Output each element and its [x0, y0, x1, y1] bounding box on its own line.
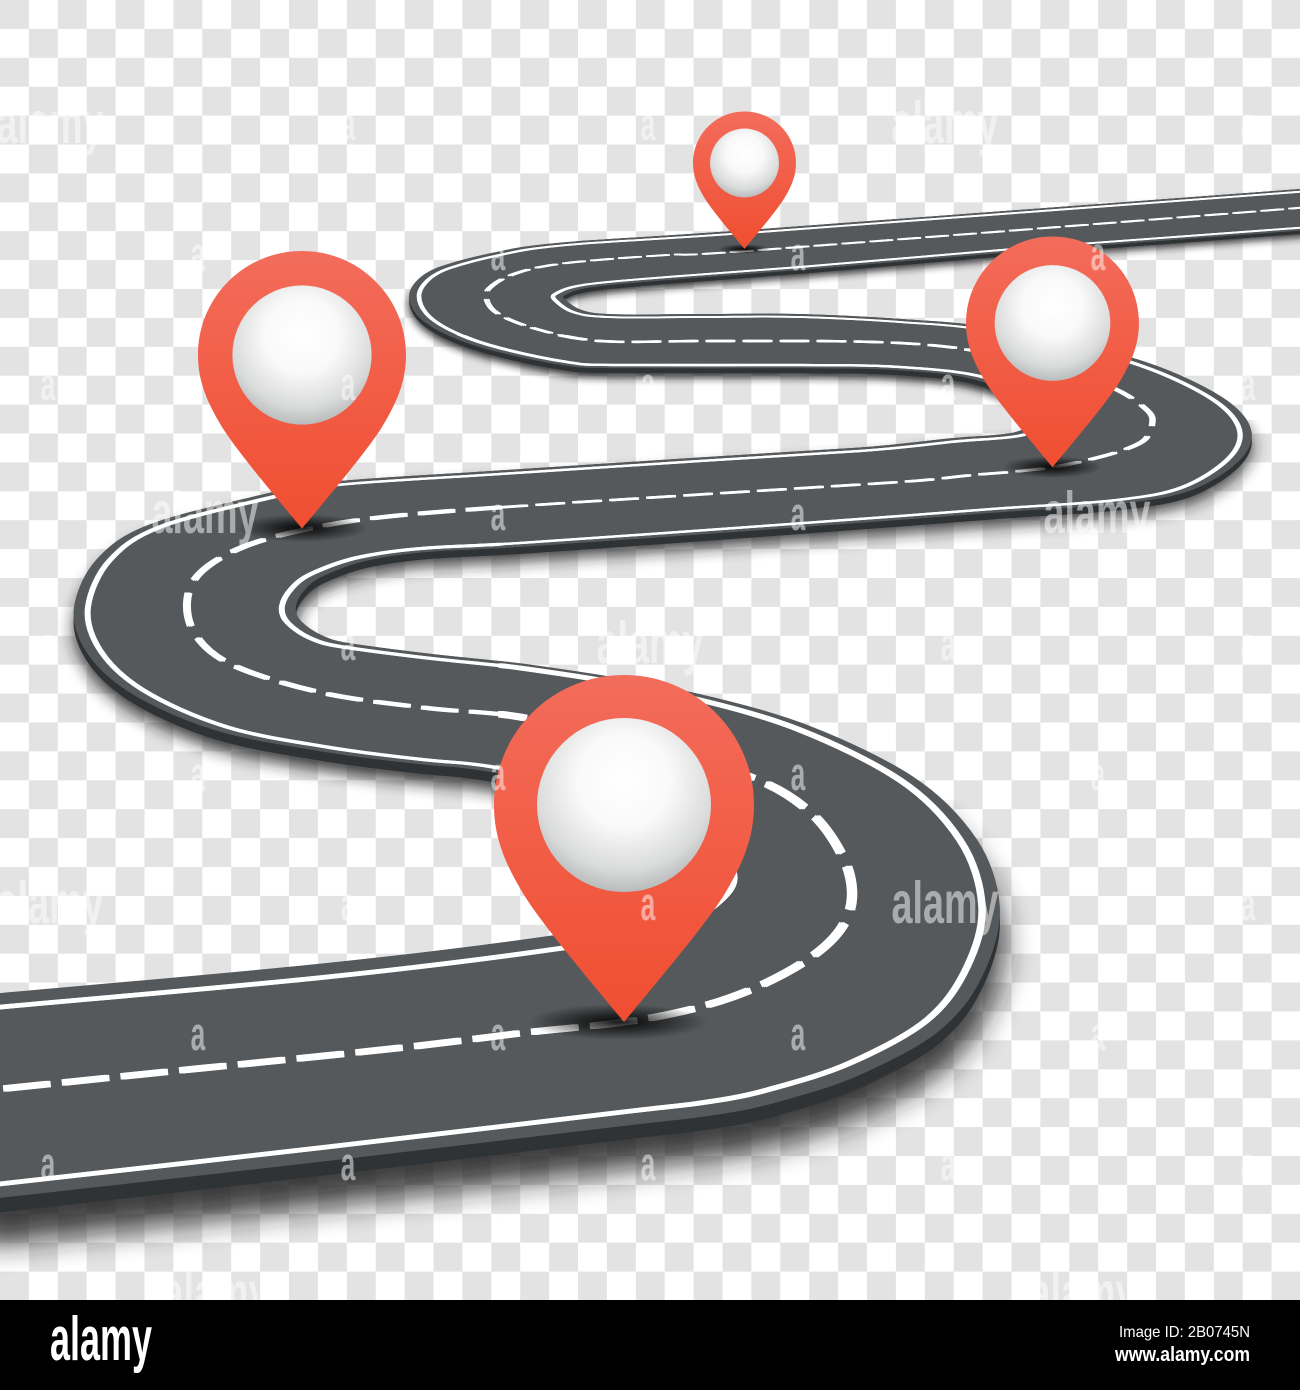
stock watermark overlay: a [641, 879, 656, 931]
road illustration [0, 179, 1300, 1242]
stock watermark overlay: alamy [151, 481, 259, 546]
stock watermark overlay: a [341, 359, 356, 411]
stock watermark overlay: a [491, 1009, 506, 1061]
stock watermark overlay: a [791, 1009, 806, 1061]
stock watermark overlay: a [491, 749, 506, 801]
road surface [0, 179, 1300, 1197]
footer bar [0, 1300, 1300, 1390]
stock watermark overlay: a [1241, 619, 1256, 671]
road side thickness [0, 182, 1300, 1212]
pin contact shadows [236, 244, 1102, 1040]
pin: top small [693, 112, 796, 249]
stock watermark overlay: a [1241, 1139, 1256, 1191]
stock watermark overlay: a [191, 1009, 206, 1061]
stock watermark overlay: alamy [596, 611, 704, 676]
stock watermark overlay: a [941, 359, 956, 411]
stock watermark overlay: a [941, 619, 956, 671]
white edge lines [0, 191, 1300, 1185]
stock watermark overlay: a [641, 359, 656, 411]
stock watermark overlay: alamy [891, 871, 999, 936]
stock watermark overlay: a [341, 99, 356, 151]
stock watermark overlay: a [191, 749, 206, 801]
stock watermark overlay: a [1241, 879, 1256, 931]
stock watermark overlay: a [641, 1139, 656, 1191]
soft drop shadow under road [0, 185, 1300, 1242]
stock watermark overlay: alamy [1029, 1261, 1137, 1326]
stock watermark overlay: a [341, 1139, 356, 1191]
pin: right [966, 237, 1139, 467]
stock watermark overlay: alamy [891, 91, 999, 156]
stock watermark overlay: a [41, 1139, 56, 1191]
image id: Image ID: 2B0745N [1119, 1324, 1250, 1341]
stock watermark overlay: alamy [162, 1261, 270, 1326]
stock watermark overlay: a [1241, 359, 1256, 411]
stock watermark overlay: a [341, 879, 356, 931]
pin: large front [494, 675, 754, 1022]
dashed centre line [0, 207, 1300, 1090]
stock watermark overlay: a [791, 749, 806, 801]
stock watermark overlay: a [1091, 749, 1106, 801]
stock watermark overlay: a [41, 619, 56, 671]
stock watermark overlay: a [791, 229, 806, 281]
website: www.alamy.com [1114, 1344, 1250, 1366]
stock watermark overlay: a [1091, 1009, 1106, 1061]
stock watermark overlay: a [341, 619, 356, 671]
stock watermark overlay: a [191, 229, 206, 281]
stock watermark overlay: a [491, 229, 506, 281]
stock watermark overlay: a [791, 489, 806, 541]
stock watermark overlay: a [1241, 99, 1256, 151]
stock watermark overlay: a [641, 99, 656, 151]
stock watermark overlay: a [491, 489, 506, 541]
footer logo: alamy [50, 1304, 152, 1373]
stock watermark overlay: alamy [1043, 481, 1151, 546]
stock watermark overlay: a [1091, 229, 1106, 281]
stock watermark overlay: a [941, 1139, 956, 1191]
pin: left [198, 251, 406, 529]
stock watermark overlay: a [41, 359, 56, 411]
